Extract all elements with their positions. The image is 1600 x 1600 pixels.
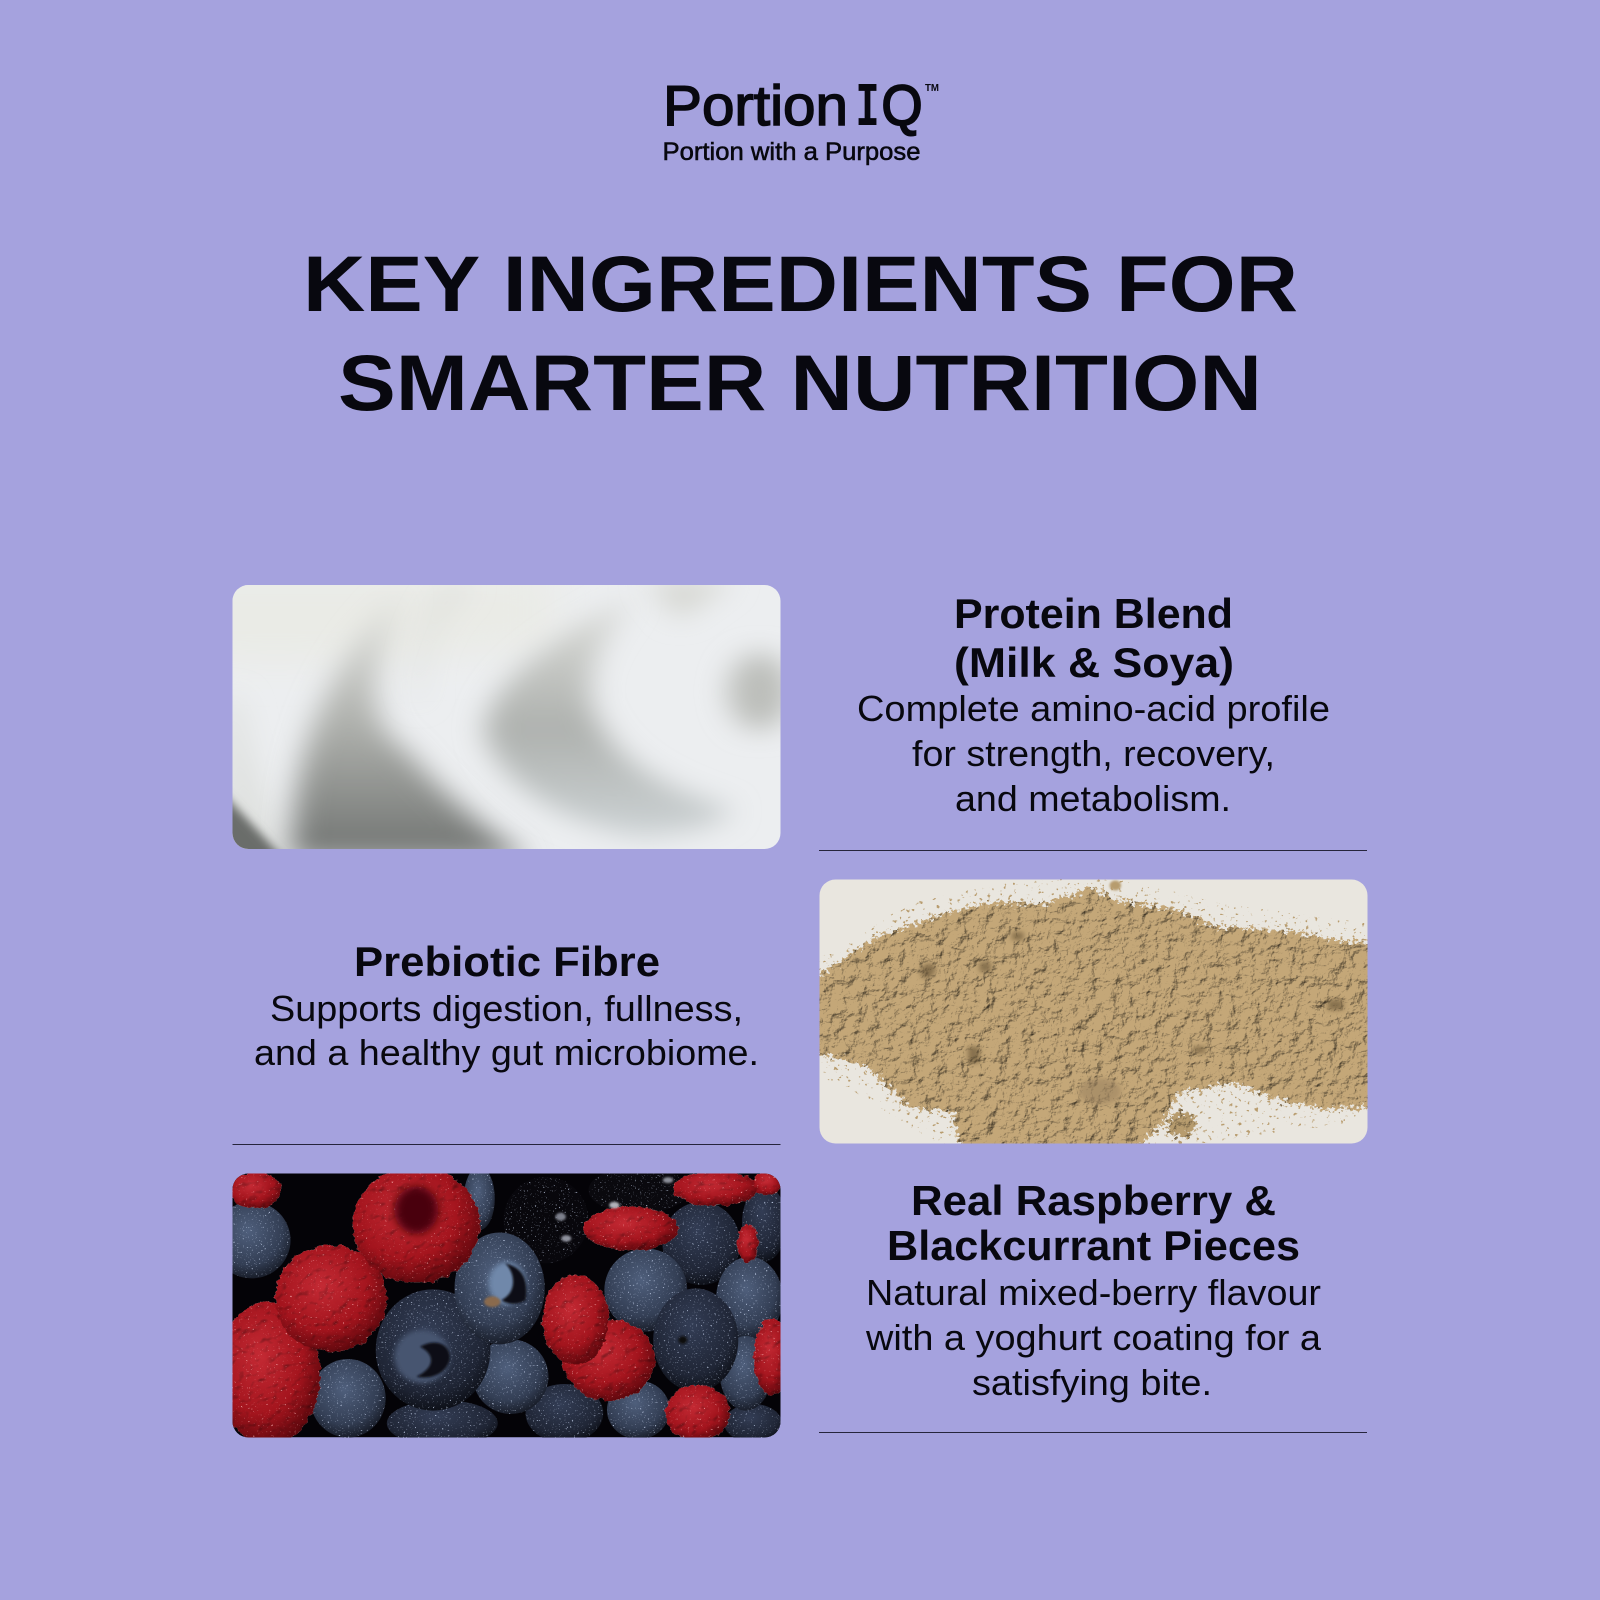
text: protein blend: and metabolism. xyxy=(955,778,1231,819)
divider left xyxy=(232,1144,780,1145)
text: protein blend: Complete amino-acid profile xyxy=(857,688,1330,729)
text: real raspberry and blackcurrant: Real Raspberry & xyxy=(911,1177,1276,1224)
title: SMARTER NUTRITION xyxy=(338,338,1262,427)
text: real raspberry and blackcurrant: Natural mixed-berry flavour xyxy=(866,1272,1321,1313)
text: real raspberry and blackcurrant xyxy=(865,1177,1322,1403)
text: prebiotic fibre xyxy=(254,938,759,1073)
text: protein blend: for strength, recovery, xyxy=(912,733,1275,774)
logo: PortionIQ: Portion xyxy=(663,74,848,138)
divider right bottom xyxy=(819,1432,1367,1433)
photo: creamy yoghurt swirl xyxy=(232,585,780,849)
logo: PortionIQ xyxy=(663,73,939,144)
text: prebiotic fibre: Prebiotic Fibre xyxy=(354,938,660,985)
logo: PortionIQ: Q xyxy=(882,74,922,138)
text: protein blend xyxy=(857,590,1330,819)
divider right top xyxy=(819,850,1367,851)
photo: powder pile xyxy=(820,880,1368,1144)
logo: PortionIQ: I xyxy=(856,73,880,144)
text: protein blend: Protein Blend xyxy=(954,590,1233,637)
text: prebiotic fibre: and a healthy gut microbiome. xyxy=(254,1032,759,1073)
title xyxy=(303,239,1298,427)
text: protein blend: (Milk & Soya) xyxy=(954,639,1234,686)
title: KEY INGREDIENTS FOR xyxy=(303,239,1298,328)
text: real raspberry and blackcurrant: satisfying bite. xyxy=(972,1362,1212,1403)
text: real raspberry and blackcurrant: Blackcurrant Pieces xyxy=(887,1222,1300,1269)
text: real raspberry and blackcurrant: with a yoghurt coating for a xyxy=(865,1317,1322,1358)
tagline: Portion with a Purpose xyxy=(662,138,920,166)
logo: PortionIQ: TM xyxy=(925,83,939,94)
photo: mixed berries xyxy=(232,1174,780,1438)
text: prebiotic fibre: Supports digestion, fullness, xyxy=(270,988,743,1029)
